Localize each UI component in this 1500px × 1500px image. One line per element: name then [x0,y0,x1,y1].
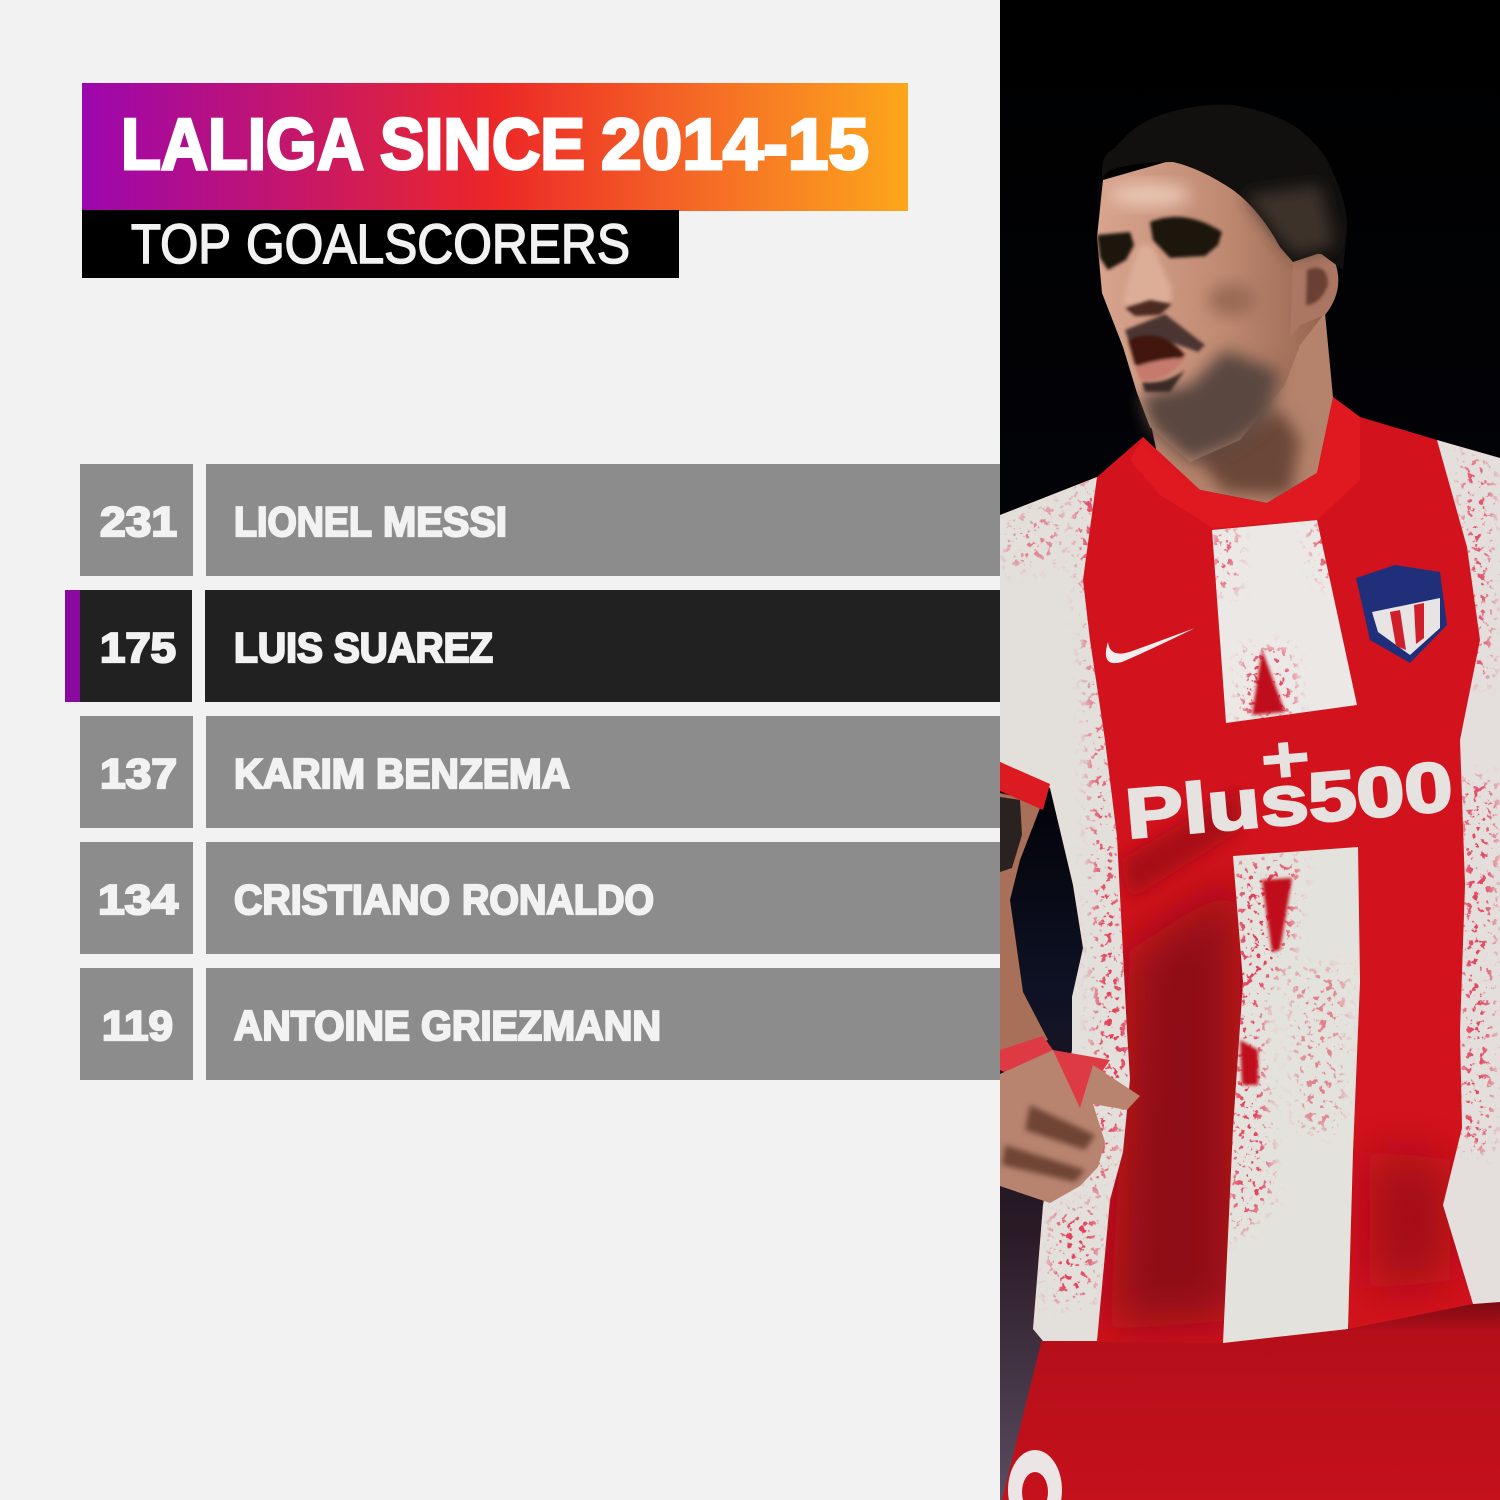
jersey: dark red folds [1110,790,1450,1330]
row 3: Karim Benzema [80,716,1000,828]
shorts number [1008,1450,1062,1500]
photo: footballer in red and white striped kit [1000,0,1500,1500]
nose [1124,245,1172,305]
shorts [1002,1295,1500,1500]
jersey: white right stripe [1437,440,1500,1304]
row 5: Antoine Griezmann: ANTOINE [234,1002,410,1049]
row 4: Cristiano Ronaldo: RONALDO [462,876,654,923]
hair [1102,105,1347,270]
head and face [1097,160,1325,462]
sponsor text: Plus500 [1122,747,1456,853]
row 4: Cristiano Ronaldo: CRISTIANO [234,876,450,923]
row 5: Antoine Griezmann: GRIEZMANN [421,1002,661,1049]
eyes and brows [1097,217,1222,270]
ear [1293,254,1338,334]
title text: LALIGA [121,105,364,185]
crest [1356,565,1447,663]
cuff: red sleeve band [1000,762,1050,810]
row 5: Antoine Griezmann: 119 [102,1002,173,1049]
nose underside [1125,300,1172,316]
jersey: paint flecks [1000,440,1500,1350]
row 1: Lionel Messi: 231 [100,498,177,545]
row 4: Cristiano Ronaldo [80,842,1000,954]
moustache and mouth [1125,314,1205,392]
title text: SINCE [380,105,585,185]
cheek shadow [1208,284,1256,316]
title text [121,105,869,185]
row 3: Karim Benzema: 137 [100,750,177,797]
row 5: Antoine Griezmann [80,968,1000,1080]
jersey: white centre stripe bottom [1223,847,1360,1343]
subtitle text: GOALSCORERS [246,212,630,275]
sponsor text [1128,742,1451,840]
subtitle text: TOP [131,212,231,275]
arm: left arm with tattoo [1000,793,1048,1056]
collar [1130,397,1360,528]
neck shadow [1190,410,1300,495]
wrist wrap and hand [1000,1036,1140,1203]
row 1: Lionel Messi: MESSI [383,498,507,545]
row 2: Luis Suarez highlighted: SUAREZ [334,624,493,671]
beard [1140,350,1280,462]
subtitle banner [82,210,679,278]
hair fade [1245,185,1335,256]
row 2: Luis Suarez highlighted [65,590,1000,702]
logo: swoosh [1106,628,1195,663]
table: top goalscorers [65,464,1000,1080]
neck [1150,310,1333,503]
row 4: Cristiano Ronaldo: 134 [98,876,179,923]
title banner [82,83,908,211]
jersey: white centre stripe top [1212,520,1357,723]
row 3: Karim Benzema: KARIM [234,750,365,797]
row 3: Karim Benzema: BENZEMA [376,750,570,797]
title text: 2014-15 [601,105,869,185]
row 2: Luis Suarez highlighted: LUIS [234,624,323,671]
row 2: Luis Suarez highlighted: 175 [100,624,176,671]
row 1: Lionel Messi: LIONEL [234,498,372,545]
forehead highlight [1110,183,1190,207]
row 1: Lionel Messi [80,464,1000,576]
ear inner [1306,268,1328,305]
jersey: white left sleeve and stripe [1000,477,1130,1341]
jersey body [1000,397,1500,1343]
